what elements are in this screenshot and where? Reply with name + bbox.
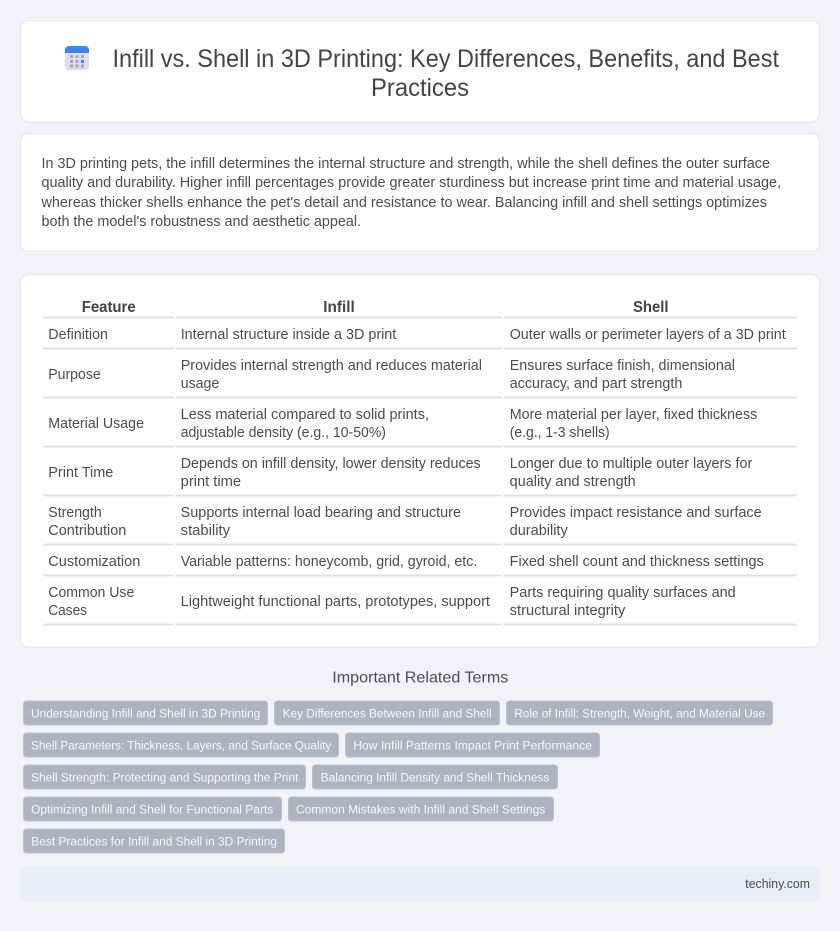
text block: introduction: quality and durability. Higher infill percentages provide greater sturdiness but increase print time and material usage, xyxy=(42,175,781,191)
table row: Strength Contribution: Contribution xyxy=(48,523,126,539)
table row: Definition: Internal structure inside a 3D print xyxy=(181,327,396,343)
tag: Understanding Infill and Shell in 3D Printing xyxy=(31,706,260,720)
table row: Print Time: Depends on infill density, lower density reduces xyxy=(181,456,481,472)
table row: Print Time: Print Time xyxy=(48,465,113,481)
table row: Material Usage: Material Usage xyxy=(48,416,144,432)
title xyxy=(112,45,779,102)
table row: Common Use Cases: structural integrity xyxy=(510,603,626,619)
table row: Common Use Cases: Lightweight functional parts, prototypes, support xyxy=(181,594,490,610)
icon: calendar grid xyxy=(65,46,89,70)
table row: Material Usage xyxy=(43,407,797,448)
tag xyxy=(24,765,306,789)
tag xyxy=(274,701,500,725)
table row: Purpose: Purpose xyxy=(48,367,101,383)
table row: Strength Contribution: durability xyxy=(510,523,569,539)
tag: Common Mistakes with Infill and Shell Settings xyxy=(296,802,545,816)
tag xyxy=(24,829,284,853)
tag: Role of Infill: Strength, Weight, and Material Use xyxy=(514,706,765,720)
tag xyxy=(24,701,268,725)
table row: Strength Contribution: Strength xyxy=(48,505,102,521)
footer text: techiny.com xyxy=(745,877,810,891)
tag xyxy=(346,733,600,757)
title: Practices xyxy=(371,74,469,102)
related term tags xyxy=(24,701,772,853)
tag xyxy=(506,701,772,725)
title: Infill vs. Shell in 3D Printing: Key Differences, Benefits, and Best xyxy=(112,45,779,73)
table row: Definition: Definition xyxy=(48,327,108,343)
table row: Common Use Cases xyxy=(43,585,797,626)
table row: Purpose: accuracy, and part strength xyxy=(510,376,682,392)
text block: introduction: both the model's robustness and aesthetic appeal. xyxy=(42,214,361,230)
table row: Customization xyxy=(43,554,797,576)
table row: Strength Contribution: Supports internal load bearing and structure xyxy=(181,505,461,521)
heading: Important Related Terms: Important Related Terms xyxy=(332,670,508,686)
tag xyxy=(312,765,558,789)
tag: Key Differences Between Infill and Shell xyxy=(283,706,492,720)
table row: Customization: Fixed shell count and thickness settings xyxy=(510,554,764,570)
text block: introduction xyxy=(40,156,781,230)
table row: Customization: Customization xyxy=(48,554,140,570)
tag: Balancing Infill Density and Shell Thickness xyxy=(321,770,549,784)
table row: Material Usage: (e.g., 1-3 shells) xyxy=(510,425,610,441)
table row: Definition xyxy=(43,327,797,350)
table row: Material Usage: adjustable density (e.g., 10-50%) xyxy=(181,425,386,441)
table header: Shell xyxy=(633,299,668,316)
table row: Material Usage: More material per layer, fixed thickness xyxy=(510,407,757,423)
table row: Purpose: Ensures surface finish, dimensional xyxy=(510,358,735,374)
table row: Material Usage: Less material compared to solid prints, xyxy=(181,407,429,423)
text block: introduction: In 3D printing pets, the infill determines the internal structure and strength, while the shell defines the outer surface xyxy=(42,156,770,172)
tag xyxy=(288,797,554,821)
table row: Strength Contribution: Provides impact resistance and surface xyxy=(510,505,762,521)
table row: Common Use Cases: Cases xyxy=(48,603,87,619)
table row: Strength Contribution xyxy=(43,505,797,546)
table row: Purpose: usage xyxy=(181,376,219,392)
table row: Common Use Cases: Parts requiring quality surfaces and xyxy=(510,585,736,601)
tag: Shell Parameters: Thickness, Layers, and Surface Quality xyxy=(31,738,332,752)
tag: Shell Strength: Protecting and Supporting the Print xyxy=(31,770,299,784)
tag xyxy=(24,733,338,757)
table row: Definition: Outer walls or perimeter layers of a 3D print xyxy=(510,327,786,343)
table row: Print Time: Longer due to multiple outer layers for xyxy=(510,456,752,472)
table row: Common Use Cases: Common Use xyxy=(48,585,134,601)
text block: introduction: whereas thicker shells enhance the pet's detail and resistance to wear. Balancing infill and shell settings optimizes xyxy=(40,195,767,211)
table row: Customization: Variable patterns: honeycomb, grid, gyroid, etc. xyxy=(181,554,477,570)
tag xyxy=(24,797,282,821)
panel: header xyxy=(20,20,820,122)
table row: Purpose: Provides internal strength and reduces material xyxy=(181,358,482,374)
table header: Infill xyxy=(323,299,355,316)
table row: Print Time: print time xyxy=(181,474,241,490)
tag: Optimizing Infill and Shell for Functional Parts xyxy=(31,802,273,816)
table header: Feature xyxy=(82,299,136,316)
tag: Best Practices for Infill and Shell in 3D Printing xyxy=(31,834,277,848)
table row: Print Time: quality and strength xyxy=(510,474,636,490)
tag: How Infill Patterns Impact Print Performance xyxy=(353,738,592,752)
table row: Purpose xyxy=(43,358,797,398)
table header xyxy=(43,299,797,318)
table row: Print Time xyxy=(43,456,797,496)
panel: comparison table xyxy=(20,274,820,647)
panel: introduction xyxy=(20,134,820,252)
table row: Strength Contribution: stability xyxy=(181,523,231,539)
footer xyxy=(20,867,820,901)
